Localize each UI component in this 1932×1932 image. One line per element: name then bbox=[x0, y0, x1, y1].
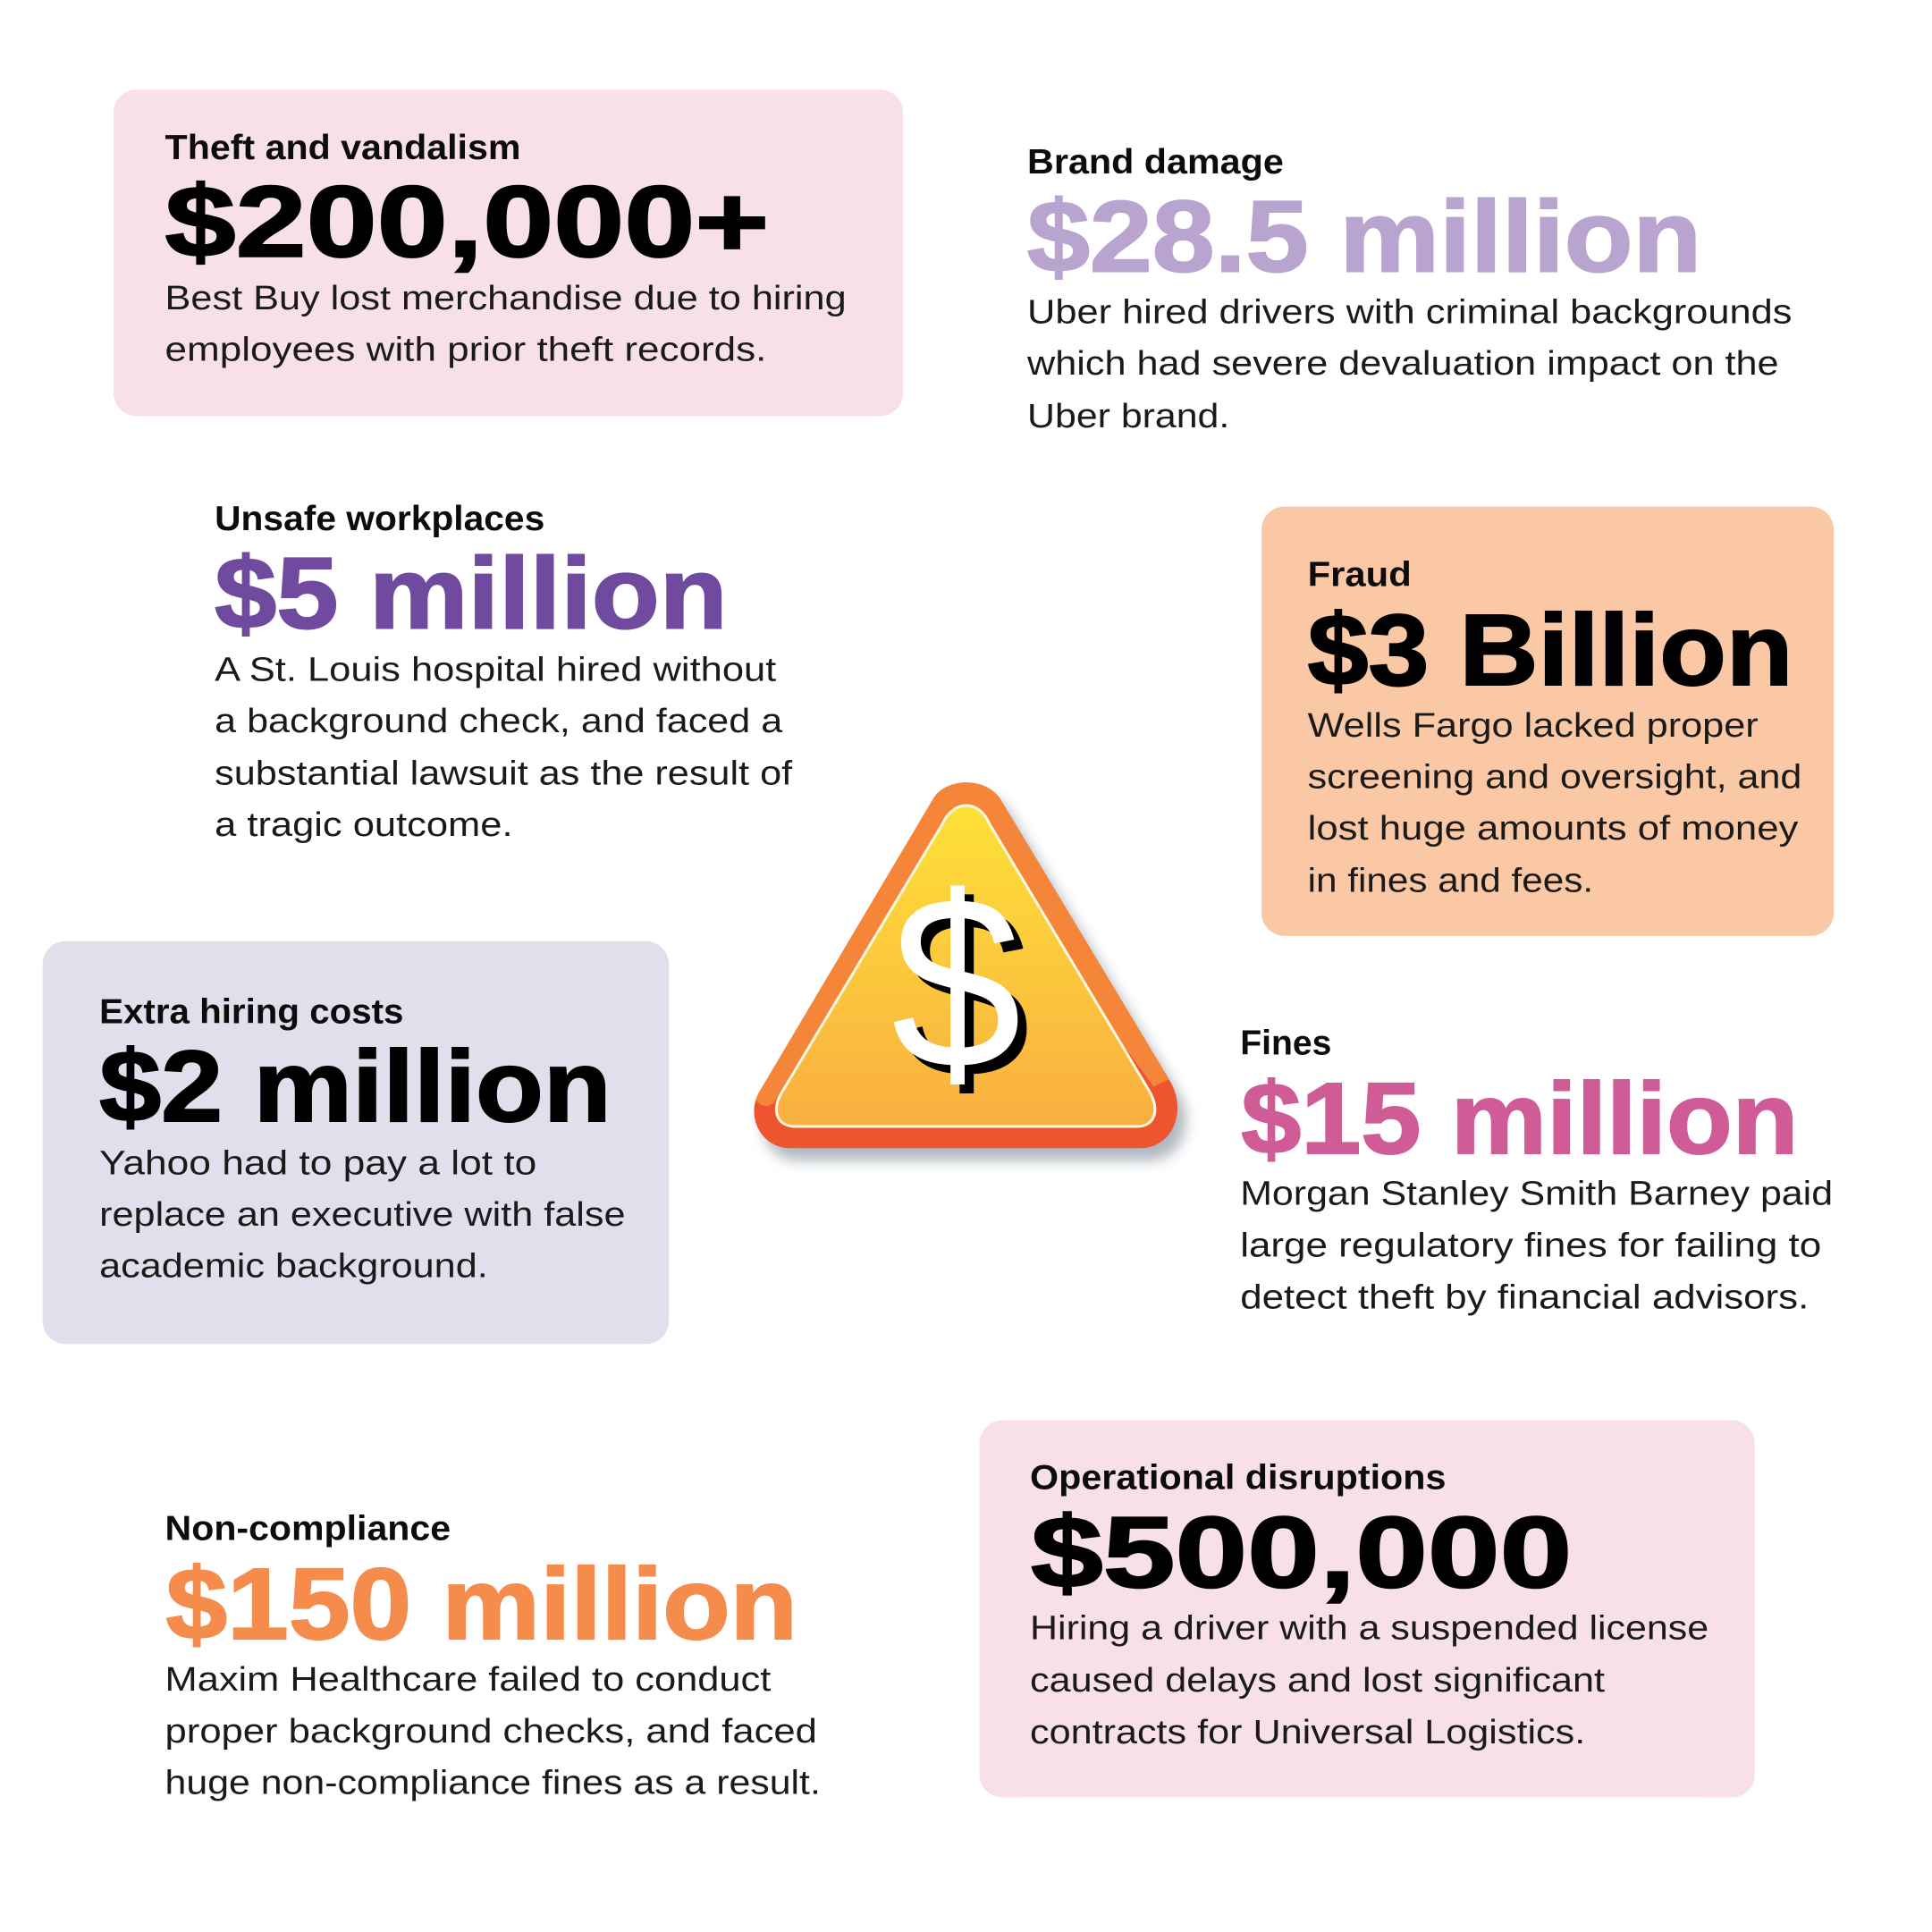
panel: operational disruptions bbox=[979, 1421, 1755, 1797]
description: replace an executive with false bbox=[99, 1195, 626, 1233]
description bbox=[165, 1660, 821, 1801]
description: contracts for Universal Logistics. bbox=[1030, 1713, 1585, 1751]
description bbox=[1240, 1175, 1833, 1316]
description: Maxim Healthcare failed to conduct bbox=[165, 1660, 772, 1698]
description: in fines and fees. bbox=[1308, 862, 1593, 899]
description: a background check, and faced a bbox=[215, 702, 782, 739]
panel: fines bbox=[1240, 1024, 1833, 1316]
description: Best Buy lost merchandise due to hiring bbox=[165, 279, 847, 316]
description: which had severe devaluation impact on the bbox=[1026, 344, 1779, 382]
heading: Unsafe workplaces bbox=[215, 500, 544, 538]
amount: $28.5 million bbox=[1027, 181, 1701, 293]
description: Wells Fargo lacked proper bbox=[1308, 706, 1759, 744]
description: Uber hired drivers with criminal backgrounds bbox=[1027, 293, 1792, 331]
panel: extra hiring costs bbox=[43, 941, 669, 1344]
card background bbox=[979, 1421, 1755, 1797]
description bbox=[165, 279, 847, 367]
panel: non-compliance bbox=[165, 1510, 821, 1801]
description bbox=[215, 651, 793, 843]
description: screening and oversight, and bbox=[1308, 758, 1801, 796]
description: caused delays and lost significant bbox=[1030, 1661, 1606, 1699]
heading: Fines bbox=[1240, 1024, 1331, 1062]
description: Uber brand. bbox=[1027, 397, 1229, 434]
amount: $2 million bbox=[99, 1030, 612, 1143]
panel: theft and vandalism bbox=[114, 89, 903, 416]
description: A St. Louis hospital hired without bbox=[215, 651, 777, 688]
heading: Non-compliance bbox=[165, 1510, 451, 1548]
amount: $3 Billion bbox=[1308, 594, 1793, 706]
description: proper background checks, and faced bbox=[165, 1712, 817, 1750]
heading: Brand damage bbox=[1027, 143, 1284, 181]
description: Hiring a driver with a suspended license bbox=[1030, 1609, 1708, 1647]
icon: warning triangle with dollar sign: $ bbox=[891, 845, 1021, 1119]
panel: unsafe workplaces bbox=[215, 500, 793, 843]
heading: Theft and vandalism bbox=[165, 129, 520, 167]
amount: $500,000 bbox=[1031, 1496, 1572, 1608]
card background bbox=[43, 941, 669, 1344]
description: academic background. bbox=[99, 1246, 488, 1284]
icon: warning triangle with dollar sign bbox=[754, 782, 1186, 1160]
heading: Fraud bbox=[1308, 555, 1412, 594]
heading: Extra hiring costs bbox=[99, 993, 403, 1032]
description bbox=[1308, 706, 1801, 899]
description bbox=[1030, 1609, 1708, 1751]
description: Morgan Stanley Smith Barney paid bbox=[1240, 1175, 1833, 1212]
card background bbox=[1261, 507, 1834, 936]
amount: $150 million bbox=[166, 1548, 797, 1660]
description: Yahoo had to pay a lot to bbox=[99, 1143, 536, 1181]
description bbox=[99, 1143, 626, 1284]
panel: fraud bbox=[1261, 507, 1834, 936]
description: a tragic outcome. bbox=[215, 806, 513, 843]
icon: warning triangle with dollar sign: $ bbox=[900, 854, 1031, 1128]
description bbox=[1026, 293, 1792, 434]
panel: brand damage bbox=[1026, 143, 1792, 434]
description: lost huge amounts of money bbox=[1308, 809, 1799, 847]
description: huge non-compliance fines as a result. bbox=[165, 1763, 821, 1801]
description: large regulatory fines for failing to bbox=[1240, 1227, 1821, 1264]
description: detect theft by financial advisors. bbox=[1240, 1278, 1809, 1316]
heading: Operational disruptions bbox=[1030, 1459, 1446, 1498]
description: employees with prior theft records. bbox=[165, 330, 766, 367]
card background bbox=[114, 89, 903, 416]
amount: $200,000+ bbox=[165, 165, 769, 278]
amount: $5 million bbox=[215, 537, 728, 650]
amount: $15 million bbox=[1241, 1062, 1798, 1175]
description: substantial lawsuit as the result of bbox=[215, 755, 793, 792]
